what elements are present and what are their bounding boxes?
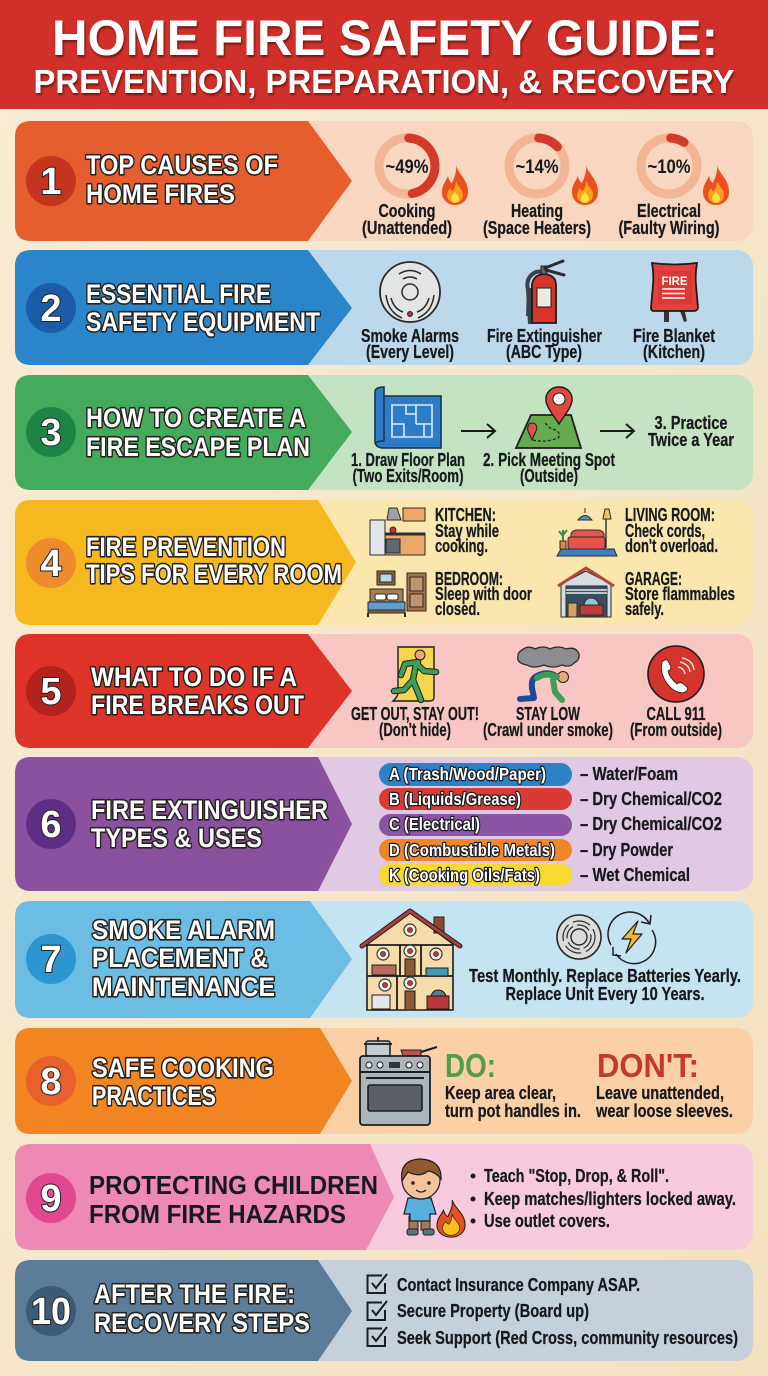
text: kitchen	[435, 505, 499, 556]
class B row: – Dry Chemical/CO2	[580, 789, 722, 809]
panel 5: if a fire breaks out	[15, 634, 753, 748]
text: bedroom: closed.	[435, 599, 480, 619]
label: heating	[483, 201, 591, 238]
label: get out: (Don't hide)	[379, 720, 451, 740]
arrow header 3	[15, 375, 352, 490]
number badge 1: 1	[40, 161, 62, 203]
text: alarm maintenance	[469, 966, 741, 1004]
icon: house cross-section	[362, 911, 460, 1010]
arrow: step 1 to 2	[461, 424, 495, 438]
label: floor plan: 1. Draw Floor Plan	[351, 450, 465, 470]
icon: living room	[557, 508, 617, 556]
heading 7: MAINTENANCE	[92, 972, 275, 1002]
heading 7: PLACEMENT &	[92, 943, 268, 973]
text: do: Keep area clear,	[445, 1083, 556, 1103]
heading 3: HOW TO CREATE A	[86, 403, 306, 433]
number badge 10: 10	[31, 1291, 71, 1333]
text: kitchen: Stay while	[435, 521, 499, 541]
heading 8: PRACTICES	[92, 1081, 216, 1111]
number badge 4: 4	[40, 543, 62, 585]
label: call 911	[630, 704, 722, 740]
label: electrical: (Faulty Wiring)	[618, 218, 720, 238]
panel 4: prevention tips	[15, 500, 753, 625]
label: heating: Heating	[511, 201, 563, 221]
number badge 5	[26, 666, 76, 716]
arrow header 7	[15, 901, 352, 1018]
title banner	[0, 0, 768, 109]
label: fire extinguisher	[487, 326, 602, 362]
label: floor plan	[351, 450, 465, 486]
text: don't: DON'T:	[597, 1047, 699, 1084]
number badge 2: 2	[40, 288, 62, 330]
donut: heating 14%	[509, 138, 598, 205]
label: call 911: (From outside)	[630, 720, 722, 740]
text: living room: don't overload.	[625, 536, 718, 556]
class D row	[379, 839, 673, 861]
title banner: HOME FIRE SAFETY GUIDE:	[52, 10, 718, 66]
panel 10: recovery	[15, 1260, 753, 1361]
heading 10	[94, 1279, 310, 1338]
label: get out: GET OUT, STAY OUT!	[351, 704, 479, 724]
donut: electrical 10%	[641, 138, 729, 205]
icon: floor plan	[375, 387, 441, 448]
checklist: recovery steps: Secure Property (Board up)	[397, 1301, 589, 1321]
label: meeting spot: (Outside)	[520, 466, 578, 486]
number badge 7: 7	[40, 939, 62, 981]
number badge 6	[26, 799, 76, 849]
text: don't: wear loose sleeves.	[595, 1101, 733, 1121]
text: living room: Check cords,	[625, 521, 705, 541]
heading 1: TOP CAUSES OF	[86, 150, 278, 180]
checklist: recovery steps	[368, 1274, 738, 1348]
number badge 3	[26, 407, 76, 457]
label: stay low: (Crawl under smoke)	[483, 720, 613, 740]
heading 2: ESSENTIAL FIRE	[86, 279, 271, 309]
text: garage: GARAGE:	[625, 569, 682, 589]
label: smoke alarms: (Every Level)	[366, 342, 454, 362]
title banner: PREVENTION, PREPARATION, & RECOVERY	[34, 63, 734, 100]
text: do: turn pot handles in.	[445, 1101, 581, 1121]
donut: cooking 49%: ~49%	[386, 157, 429, 178]
label: meeting spot	[483, 450, 615, 486]
class C row: – Dry Chemical/CO2	[580, 814, 722, 834]
label: smoke alarms	[361, 326, 459, 362]
class K row	[379, 864, 690, 886]
heading 5	[91, 662, 304, 720]
icon: fire extinguisher	[526, 261, 564, 324]
heading 3: FIRE ESCAPE PLAN	[86, 432, 310, 462]
text: garage: safely.	[625, 599, 664, 619]
icon: fire blanket: FIRE	[662, 274, 688, 288]
arrow header 10	[15, 1260, 352, 1361]
bullet list: children: Use outlet covers.	[484, 1211, 610, 1231]
arrow header 1	[15, 121, 352, 241]
heading 9: PROTECTING CHILDREN	[89, 1170, 378, 1200]
class A row	[379, 763, 678, 786]
label: practice: Twice a Year	[648, 430, 734, 450]
heading 10: AFTER THE FIRE:	[94, 1279, 295, 1309]
text: kitchen: cooking.	[435, 536, 488, 556]
arrow: step 2 to 3	[600, 424, 634, 438]
number badge 8	[26, 1056, 76, 1106]
heading 1	[86, 150, 278, 209]
donut: electrical 10%: ~10%	[648, 157, 691, 178]
icon: stay low under smoke	[518, 647, 579, 700]
label: fire blanket: Fire Blanket	[633, 326, 715, 346]
text: alarm maintenance: Replace Unit Every 10 Years.	[506, 984, 704, 1004]
number badge 9	[26, 1173, 76, 1223]
text: living room	[625, 505, 718, 556]
number badge 3: 3	[40, 412, 62, 454]
text: do	[445, 1047, 581, 1121]
panel 1: top causes of home fires	[15, 121, 753, 241]
heading 9: FROM FIRE HAZARDS	[89, 1199, 346, 1229]
label: electrical	[618, 201, 720, 238]
heading 8	[92, 1053, 274, 1111]
heading 6: FIRE EXTINGUISHER	[91, 795, 328, 825]
label: fire blanket: (Kitchen)	[643, 342, 705, 362]
arrow header 6	[15, 757, 352, 891]
class C row	[379, 814, 722, 836]
class B row	[379, 788, 722, 810]
heading 4: TIPS FOR EVERY ROOM	[86, 559, 342, 589]
icon: meeting spot map	[516, 387, 581, 448]
checklist: recovery steps: Contact Insurance Company ASAP.	[397, 1275, 640, 1295]
number badge 8: 8	[40, 1061, 62, 1103]
text: living room: LIVING ROOM:	[625, 505, 715, 525]
arrow header 2	[15, 250, 352, 365]
label: cooking: Cooking	[378, 201, 436, 221]
label: cooking: (Unattended)	[362, 218, 452, 238]
arrow header 5	[15, 634, 352, 748]
heading 10: RECOVERY STEPS	[94, 1308, 310, 1338]
panel 6: extinguisher types	[15, 757, 753, 891]
icon: phone	[648, 646, 704, 702]
heading 1: HOME FIRES	[86, 179, 235, 209]
label: practice: 3. Practice	[654, 413, 728, 433]
heading 7: SMOKE ALARM	[92, 915, 275, 945]
number badge 1	[26, 156, 76, 206]
class C row: C (Electrical)	[389, 814, 480, 834]
arrow header 9	[15, 1144, 394, 1250]
text: bedroom: BEDROOM:	[435, 569, 503, 589]
label: smoke alarms: Smoke Alarms	[361, 326, 459, 346]
label: stay low: STAY LOW	[516, 704, 580, 724]
bullet list: children	[470, 1166, 736, 1231]
heading 5: WHAT TO DO IF A	[91, 662, 297, 692]
label: call 911: CALL 911	[646, 704, 706, 724]
donut: cooking 49%	[379, 138, 468, 205]
label: get out	[351, 704, 479, 740]
text: bedroom: Sleep with door	[435, 584, 532, 604]
class A row: – Water/Foam	[580, 764, 678, 784]
number badge 9: 9	[40, 1178, 62, 1220]
heading 2	[86, 279, 320, 337]
label: fire extinguisher: Fire Extinguisher	[487, 326, 602, 346]
label: heating: (Space Heaters)	[483, 218, 591, 238]
arrow header 8	[15, 1028, 352, 1134]
label: electrical: Electrical	[637, 201, 701, 221]
heading 7	[92, 915, 275, 1002]
panel 7: smoke alarm placement	[15, 901, 753, 1018]
class K row: K (Cooking Oils/Fats)	[389, 865, 540, 885]
heading 5: FIRE BREAKS OUT	[91, 690, 304, 720]
icon: child and flame	[402, 1159, 465, 1237]
label: stay low	[483, 704, 613, 740]
class K row: – Wet Chemical	[580, 865, 690, 885]
text: garage	[625, 569, 735, 619]
icon: garage	[558, 568, 614, 617]
label: fire extinguisher: (ABC Type)	[506, 342, 582, 362]
heading 6: TYPES & USES	[91, 823, 262, 853]
label: floor plan: (Two Exits/Room)	[352, 466, 464, 486]
text: kitchen: KITCHEN:	[435, 505, 496, 525]
heading 9	[89, 1170, 378, 1229]
icon: stove	[360, 1037, 437, 1125]
icon: smoke alarm	[380, 262, 440, 322]
icon: bedroom	[368, 571, 426, 617]
icon: battery cycle	[608, 912, 656, 964]
heading 3	[86, 403, 310, 462]
number badge 5: 5	[40, 671, 62, 713]
number badge 6: 6	[40, 804, 62, 846]
text: don't: Leave unattended,	[596, 1083, 724, 1103]
class D row: – Dry Powder	[580, 840, 673, 860]
heading 8: SAFE COOKING	[92, 1053, 274, 1083]
arrow header 4	[15, 500, 356, 625]
text: bedroom	[435, 569, 532, 619]
text: don't	[595, 1047, 733, 1121]
panel 3: escape plan	[15, 375, 753, 490]
label: cooking	[362, 201, 452, 238]
heading 4: FIRE PREVENTION	[86, 532, 286, 562]
label: practice	[648, 413, 734, 450]
number badge 4	[26, 538, 76, 588]
class A row: A (Trash/Wood/Paper)	[389, 764, 546, 784]
class D row: D (Combustible Metals)	[389, 840, 555, 860]
panel 9: protecting children	[15, 1144, 753, 1250]
panel 8: safe cooking	[15, 1028, 753, 1134]
number badge 2	[26, 283, 76, 333]
text: do: DO:	[445, 1047, 496, 1084]
icon: exit runner	[393, 647, 436, 701]
label: fire blanket	[633, 326, 715, 362]
heading 6	[91, 795, 328, 853]
icon: kitchen	[370, 508, 425, 555]
donut: heating 14%: ~14%	[516, 157, 559, 178]
label: meeting spot: 2. Pick Meeting Spot	[483, 450, 615, 470]
heading 4	[86, 532, 342, 589]
icon: alarm test	[557, 915, 601, 959]
bullet list: children: Teach "Stop, Drop, & Roll".	[484, 1166, 669, 1186]
class B row: B (Liquids/Grease)	[389, 789, 521, 809]
icon: fire blanket	[651, 263, 698, 322]
panel 2: essential equipment	[15, 250, 753, 365]
heading 2: SAFETY EQUIPMENT	[86, 307, 320, 337]
number badge 7	[26, 934, 76, 984]
